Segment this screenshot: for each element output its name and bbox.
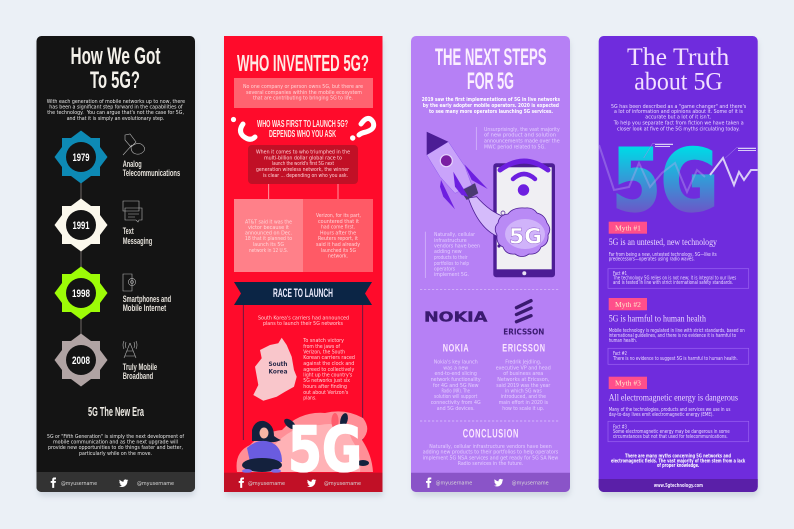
- box: AT&T: launch its 5G: [253, 242, 284, 248]
- intro text: to see many more operators launching 5G services.: [429, 109, 553, 115]
- intro box: No one company or person owns 5G, but there are: [243, 84, 363, 90]
- intro text: by the early adopter mobile operators. 2020 is expected: [423, 103, 559, 109]
- label: Text Messaging: Messaging: [123, 236, 152, 247]
- footer: website: www.5gtechnology.com: [654, 483, 703, 489]
- banner: Race to Launch: RACE TO LAUNCH: [273, 288, 333, 300]
- side note left: operators: [434, 266, 455, 272]
- side note left: Naturally, cellular: [434, 232, 476, 238]
- side note top: announcements made over the: [484, 138, 560, 144]
- intro text: and that it is simply an evolutionary step.: [67, 116, 165, 122]
- title: [435, 44, 546, 95]
- myth 1: [608, 222, 749, 288]
- conclusion text: [423, 444, 559, 467]
- Ericsson text: Networks at Ericsson,: [497, 377, 550, 383]
- illustration: phone: [493, 161, 555, 277]
- Nokia text: [431, 360, 481, 412]
- intro text: [422, 97, 560, 115]
- Ericsson text: Fredrik Jejdling,: [505, 360, 542, 366]
- label: Text Messaging: Text: [123, 226, 134, 237]
- box: AT&T: AT&T said it was the: [245, 219, 292, 225]
- milestone 1979: 1979: [72, 152, 90, 164]
- timeline connector: [80, 180, 82, 340]
- footer: social handles: @myusername: [512, 481, 549, 487]
- myth 3 text: [609, 407, 731, 418]
- intro text: 5G has been described as a "game changer" and there's: [611, 104, 747, 110]
- intro box: several companies within the mobile ecosystem: [246, 90, 362, 96]
- footer: social handles: @myusername: [61, 481, 97, 487]
- box: Verizon: had come first.: [321, 224, 355, 230]
- milestone 2008: [54, 334, 108, 386]
- myth 3 tag: Myth #3: [615, 378, 641, 388]
- label: Smartphones and Mobile Internet: Mobile Internet: [123, 303, 167, 314]
- race body text: out about Verizon's: [303, 390, 349, 396]
- title: [627, 44, 730, 95]
- race intro text: plans to launch their 5G networks: [263, 321, 343, 327]
- title: How We Got: [70, 43, 160, 70]
- intro text: accurate but a lot of it isn't.: [645, 114, 712, 120]
- illustration: woman and 5G: [237, 411, 373, 486]
- label: Smartphones and Mobile Internet: Smartphones and: [123, 294, 171, 305]
- box: AT&T: announced on Dec.: [245, 230, 292, 236]
- milestone 1979: [54, 130, 108, 184]
- closing text: particularly while on the move.: [79, 451, 152, 457]
- fact 3: Fact #3: [613, 424, 627, 430]
- callout box: When it comes to who triumphed in the: [256, 150, 350, 156]
- race intro text: [258, 316, 349, 327]
- conclusion text: Radio services in the future.: [458, 461, 524, 467]
- race body text: 5G networks just six: [303, 378, 350, 384]
- closing text: mobile communication and as the next upgrade will: [53, 439, 178, 445]
- milestone 1998: [54, 266, 108, 320]
- conclusion text: implement 5G NSA services and get ready for 5G SA New: [423, 456, 558, 462]
- title: about 5G: [634, 68, 723, 95]
- fact 1: The technology 5G relies on is not new; it is integral to our lives: [612, 276, 737, 282]
- race body text: against the clock and: [303, 361, 354, 367]
- heading: 5G The New Era: 5G The New Era: [88, 405, 145, 419]
- box: Verizon: countered that it: [318, 219, 359, 225]
- heading: Conclusion: CONCLUSION: [463, 428, 519, 440]
- intro text: [611, 104, 747, 132]
- myth 2: [608, 298, 749, 364]
- myth 1 heading: 5G is an untested, new technology: [609, 238, 717, 248]
- label: Analog Telecommunications: Telecommunications: [123, 168, 180, 179]
- milestone 1991: [54, 198, 108, 252]
- Nokia text: network functionality: [431, 377, 481, 383]
- footer: social handles: @myusername: [137, 481, 174, 487]
- callout box: launch the world's first 5G next: [272, 161, 334, 167]
- box: Verizon: launched its 5G: [321, 248, 356, 254]
- side note top: of new product and solution: [484, 132, 556, 138]
- race body text: from the jaws of: [303, 344, 340, 350]
- fact 3: [608, 421, 749, 442]
- box: Verizon: said it had already: [316, 242, 360, 248]
- race body text: To snatch victory: [302, 338, 344, 344]
- side note left: products to their: [434, 255, 468, 261]
- title: WHO INVENTED 5G?: [237, 50, 369, 76]
- side note left: vendors have been: [434, 244, 480, 250]
- label: Analog Telecommunications: Analog: [123, 159, 142, 170]
- illustration: woman and 5G: 5G: [288, 413, 362, 486]
- Ericsson text: introduced, and the: [501, 394, 546, 400]
- milestone 2008: 2008: [72, 355, 90, 367]
- box: AT&T: [234, 199, 303, 272]
- illustration: 5G cloud: 5G: [509, 224, 542, 248]
- Nokia text: end-to-end slicing: [434, 371, 477, 377]
- myth 2 tag: Myth #2: [615, 300, 641, 309]
- footer: social handles: @myusername: [324, 481, 361, 487]
- side note left: portfolios to help: [434, 261, 469, 267]
- logo: Ericsson: [503, 301, 544, 336]
- milestone 1991: 1991: [72, 220, 90, 232]
- myth 2 text: [609, 328, 745, 344]
- race body text: plans.: [303, 396, 317, 402]
- side note left: adding new: [434, 249, 462, 255]
- title: To 5G?: [90, 67, 140, 94]
- graphic: 5G with pulse line: 5G: [612, 132, 718, 232]
- Nokia text: solution will support: [434, 394, 477, 400]
- Ericsson text: how to scale it up.: [502, 406, 545, 412]
- race body text: [302, 338, 355, 402]
- box: AT&T: victor because it: [248, 225, 289, 231]
- icon: inverted question mark: [231, 117, 255, 139]
- race body text: Korean carriers raced: [303, 355, 355, 361]
- closing text: provide new opportunities to do things faster and better,: [48, 445, 183, 451]
- title: [70, 43, 160, 94]
- footer: social handles: @myusername: [248, 481, 285, 487]
- Ericsson text: of business area: [503, 371, 543, 377]
- intro text: the technology. You can argue that's not the case for 5G,: [47, 110, 184, 116]
- Ericsson text: main effort in 2020 is: [499, 400, 548, 406]
- intro text: a lot of information and opinions about it. Some of it is: [614, 109, 743, 115]
- subheading: WHO WAS FIRST TO LAUNCH 5G?: [257, 118, 348, 130]
- closing text: 5G or "Fifth Generation" is simply the next development of: [47, 434, 184, 440]
- myth 3 text: Many of the technologies, products and services we use in us: [609, 407, 731, 413]
- milestone 1998: 1998: [72, 288, 90, 300]
- myth 2 text: Mobile technology is regulated in line with strict standards, based on: [609, 328, 745, 334]
- fact 1: [608, 269, 749, 288]
- side note left: infrastructure: [434, 238, 467, 244]
- illustration: 5G cloud: [495, 208, 550, 256]
- dashed dividers: [420, 290, 560, 421]
- conclusion text: adding new products to their portfolios to help operators: [423, 450, 559, 456]
- fact 3: Some electromagnetic energy may be dangerous in some: [613, 429, 730, 435]
- frame lines: [243, 305, 363, 440]
- race body text: hours after finding: [303, 384, 347, 390]
- icon: chat bubbles: [123, 201, 142, 222]
- panel: How We Got To 5G: [36, 36, 195, 496]
- banner: Race to Launch: [234, 282, 372, 305]
- heading: Nokia: NOKIA: [443, 343, 469, 355]
- footer: social handles: [411, 473, 570, 492]
- box: Verizon: Reuters report, it: [318, 236, 358, 242]
- Ericsson text: executive VP and head: [496, 366, 551, 372]
- fact 1: and is tested in line with strict international safety standards.: [613, 280, 733, 286]
- Nokia text: for 4G and 5G New: [433, 383, 479, 389]
- footer: social handles: @myusername: [436, 481, 472, 487]
- myth 1 tag: Myth #1: [615, 223, 641, 232]
- footer: social handles: [224, 473, 382, 492]
- label: Smartphones and Mobile Internet: [123, 294, 171, 314]
- label: Analog Telecommunications: [123, 159, 180, 179]
- intro text: closer look at five of the 5G myths circulating today.: [617, 126, 740, 132]
- icon: smartphone with gear: [123, 274, 136, 291]
- Ericsson text: said 2019 was the year: [496, 383, 551, 389]
- side note top: [476, 127, 560, 150]
- panel: Who Invented 5G: [224, 36, 383, 496]
- fact 2: Fact #2: [613, 351, 627, 357]
- logo: Nokia: NOKIA: [424, 310, 488, 326]
- myth 3: [608, 377, 749, 442]
- title: THE NEXT STEPS: [435, 44, 546, 71]
- panel: The Next Steps for 5G: [411, 36, 570, 496]
- side note left: implement 5G.: [434, 272, 469, 278]
- intro text: With each generation of mobile networks up to now, there: [47, 99, 185, 105]
- closing text: electromagnetic fields. The vast majority of them stem from a lack: [611, 458, 746, 464]
- side note left: [425, 232, 480, 278]
- label: Truly Mobile Broadband: Broadband: [123, 371, 153, 382]
- fact 1: Fact #1: [613, 271, 627, 277]
- intro box: that are contributing to bringing 5G to life.: [253, 96, 353, 102]
- map: South Korea: South: [268, 360, 288, 368]
- box: AT&T: 18 that it planned to: [245, 236, 292, 242]
- race body text: light up the country's: [303, 372, 353, 378]
- title: The Truth: [627, 44, 730, 71]
- logo: Ericsson: ERICSSON: [503, 327, 544, 336]
- callout box: [248, 145, 358, 184]
- myth 2 text: human health.: [609, 338, 637, 344]
- race intro text: South Korea's carriers had announced: [258, 316, 349, 322]
- panel: The Truth about 5G: [599, 36, 758, 496]
- connectors: [269, 184, 338, 199]
- myth 2 text: international guidelines, and there is no evidence it is harmful to: [609, 333, 736, 339]
- myth 1 text: Far from being a new, untested technology, 5G—like its: [609, 252, 717, 258]
- fact 2: There is no evidence to suggest 5G is harmful to human health.: [612, 356, 738, 362]
- subheading: DEPENDS WHO YOU ASK: [269, 128, 336, 140]
- myth 3 text: day-to-day lives emit electromagnetic energy (EME).: [609, 412, 714, 418]
- side note top: MWC period related to 5G.: [484, 144, 546, 150]
- illustration: rocket: [427, 132, 505, 238]
- Nokia text: Radio (NR). The: [442, 388, 470, 394]
- closing text: of proper knowledge.: [657, 463, 699, 469]
- label: Truly Mobile Broadband: [123, 362, 157, 382]
- icon: hand with phone: [123, 134, 145, 155]
- callout box: is clear ... depending on who you ask.: [263, 173, 348, 179]
- intro box: [234, 78, 373, 108]
- box: Verizon: Verizon, for its part,: [316, 213, 361, 219]
- box: Verizon: network.: [328, 254, 348, 260]
- callout box: generation wireless network, the winner: [256, 167, 350, 173]
- closing text: There are many myths concerning 5G networks and: [625, 454, 731, 460]
- box: AT&T: network in 12 U.S.: [249, 248, 288, 254]
- myth 1 text: predecessors—operates using radio waves.: [609, 256, 695, 262]
- fact 2: [608, 348, 749, 364]
- map: South Korea: Korea: [268, 367, 288, 375]
- footer: website: [599, 479, 758, 492]
- side note top: Unsurprisingly, the vast majority: [484, 127, 560, 133]
- subheading: [257, 118, 348, 140]
- icon: question mark: [350, 118, 374, 141]
- map: South Korea: [253, 338, 297, 401]
- myth 2 tag: [609, 298, 647, 310]
- myth 1 text: [609, 252, 717, 262]
- Nokia text: Nokia's key launch: [434, 360, 478, 366]
- intro text: 2019 saw the first implementations of 5G in live networks: [422, 97, 560, 103]
- closing text: [47, 434, 184, 457]
- conclusion text: Naturally, cellular infrastructure vendors have been: [429, 444, 552, 450]
- intro text: has been a significant step forward in the capabilities of: [49, 104, 183, 110]
- label: Text Messaging: [123, 226, 152, 247]
- closing text: [611, 454, 746, 469]
- box: Verizon: [303, 199, 373, 272]
- myth 1 tag: [609, 222, 647, 234]
- myth 2 heading: 5G is harmful to human health: [609, 314, 706, 325]
- myth 3 heading: All electromagnetic energy is dangerous: [609, 394, 738, 404]
- icon: radio tower: [123, 341, 137, 358]
- box: Verizon: Hours after the: [320, 230, 356, 236]
- fact 3: circumstances but not that used for telecommunications.: [613, 434, 728, 440]
- title: FOR 5G: [467, 68, 514, 95]
- intro text: [47, 99, 185, 122]
- myth 3 tag: [609, 377, 647, 389]
- Nokia text: and 5G devices.: [437, 406, 475, 412]
- Ericsson text: [496, 360, 551, 412]
- footer: social handles: [36, 472, 195, 492]
- heading: Ericsson: ERICSSON: [502, 343, 546, 355]
- Nokia text: was a new: [443, 366, 468, 372]
- race body text: agreed to collectively: [303, 367, 354, 373]
- callout box: multi-billion dollar global race to: [264, 156, 342, 162]
- race body text: Verizon, the South: [303, 350, 345, 356]
- Ericsson text: in which 5G was: [505, 388, 542, 394]
- label: Truly Mobile Broadband: Truly Mobile: [123, 362, 157, 373]
- Nokia text: connectivity from 4G: [431, 400, 481, 406]
- intro text: To help you separate fact from fiction we have taken a: [613, 120, 744, 126]
